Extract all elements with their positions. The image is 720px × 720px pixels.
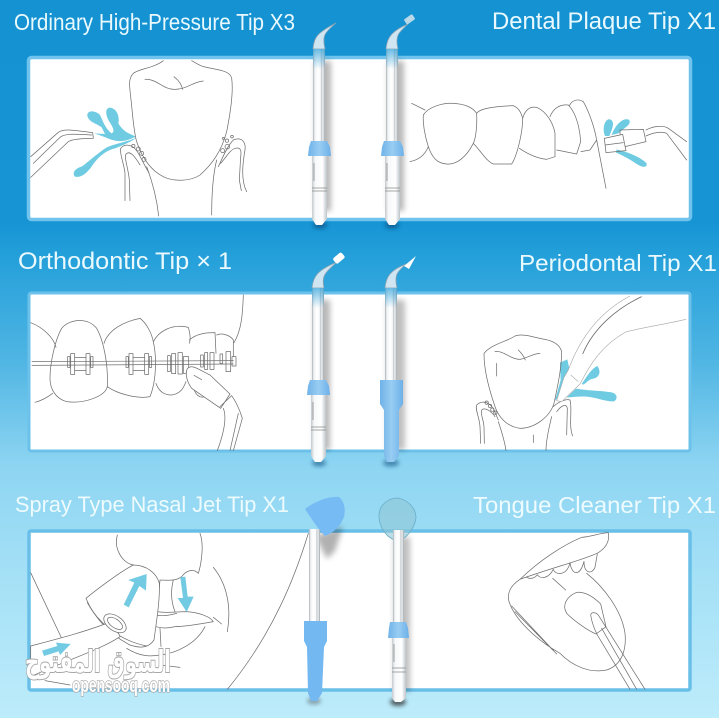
illustration: teeth side view with plaque nozzle	[410, 100, 687, 188]
water spray	[555, 359, 617, 401]
collar	[307, 380, 330, 395]
cleaner disc	[379, 498, 416, 541]
drop shadow	[388, 61, 404, 211]
nozzle bend	[386, 24, 408, 49]
heading: tongue cleaner tip: Tongue Cleaner Tip X1	[473, 492, 716, 518]
tip: periodontal	[380, 256, 416, 466]
collar	[388, 622, 409, 638]
nozzle bend	[313, 23, 336, 49]
heading: orthodontic tip: Orthodontic Tip × 1	[18, 248, 232, 275]
illustration: tooth cross-section with periodontal nozzle	[476, 295, 686, 451]
watermark	[25, 645, 171, 697]
watermark arabic: السوق المفتوح	[25, 645, 171, 680]
tooth root and gums	[476, 400, 573, 451]
tip: dental plaque	[381, 14, 415, 228]
tongue cleaner handle	[591, 613, 645, 689]
illustration: nasal rinse into nose	[31, 533, 308, 689]
drop shadow	[314, 300, 330, 450]
nasal cone	[305, 497, 345, 536]
tooth root	[147, 160, 217, 216]
heading: ordinary high-pressure tip: Ordinary High-Pressure Tip X3	[14, 9, 295, 35]
tube	[393, 530, 404, 622]
jet nozzle	[31, 130, 93, 177]
nasal tip cone	[86, 565, 159, 647]
tube	[386, 49, 398, 141]
tooth outline	[484, 335, 562, 443]
tube	[385, 288, 397, 380]
illustration: braces on teeth with orthodontic nozzle	[31, 295, 243, 451]
tip: orthodontic	[307, 252, 345, 466]
panel: orthodontic and periodontal tips	[29, 293, 690, 451]
tongue cleaner pad	[565, 592, 606, 634]
drop shadow	[315, 526, 343, 559]
teeth outline	[31, 295, 243, 402]
orthodontic nozzle	[186, 367, 230, 408]
tip: ordinary high-pressure	[308, 23, 336, 228]
periodontal nozzle and handle	[557, 295, 686, 402]
illustration: gum cross-section with jet spray	[31, 61, 247, 216]
collar	[308, 141, 331, 156]
plaque bubbles	[132, 135, 233, 161]
watermark latin: opensooq.com	[72, 675, 170, 697]
water spray	[74, 108, 137, 177]
plaque bubbles	[485, 401, 497, 414]
heading: spray type nasal jet tip: Spray Type Nasal Jet Tip X1	[15, 492, 289, 517]
tube	[313, 49, 325, 141]
base	[392, 638, 406, 702]
brush head	[404, 14, 415, 25]
blue body	[304, 621, 327, 701]
drop shadow	[387, 300, 405, 450]
arrow: out of nose	[178, 577, 194, 612]
brush head	[332, 252, 345, 264]
heading: dental plaque tip: Dental Plaque Tip X1	[492, 8, 716, 35]
arrow: into nostril	[124, 574, 147, 607]
illustration: open mouth with tongue cleaner	[508, 533, 645, 689]
tip: tongue cleaner	[379, 498, 416, 706]
nozzle bend	[385, 264, 406, 288]
plaque nozzle	[604, 126, 687, 160]
tooth row outline	[410, 100, 606, 188]
gums	[120, 139, 247, 201]
mouth outline	[508, 533, 625, 671]
nozzle bend	[312, 262, 337, 288]
tube	[309, 529, 320, 622]
face outline	[31, 533, 308, 689]
tip: spray type nasal jet	[304, 497, 345, 704]
tooth outline	[130, 61, 232, 180]
drop shadow	[394, 537, 410, 692]
water spray	[604, 119, 647, 167]
orthodontic wire	[32, 361, 233, 365]
blue body	[380, 380, 403, 462]
handle and hose	[31, 624, 120, 677]
heading: periodontal tip: Periodontal Tip X1	[519, 250, 717, 276]
drop shadow	[315, 61, 331, 211]
collar	[381, 141, 404, 156]
nozzle point	[404, 256, 416, 269]
base	[311, 395, 326, 462]
tube	[312, 288, 324, 380]
base	[312, 156, 327, 225]
arrow: through handle	[42, 643, 71, 656]
base	[385, 156, 400, 225]
panel: ordinary high-pressure tip and dental plaque tip	[28, 58, 690, 220]
panel: nasal jet and tongue cleaner tips	[29, 531, 690, 690]
braces	[68, 352, 236, 374]
